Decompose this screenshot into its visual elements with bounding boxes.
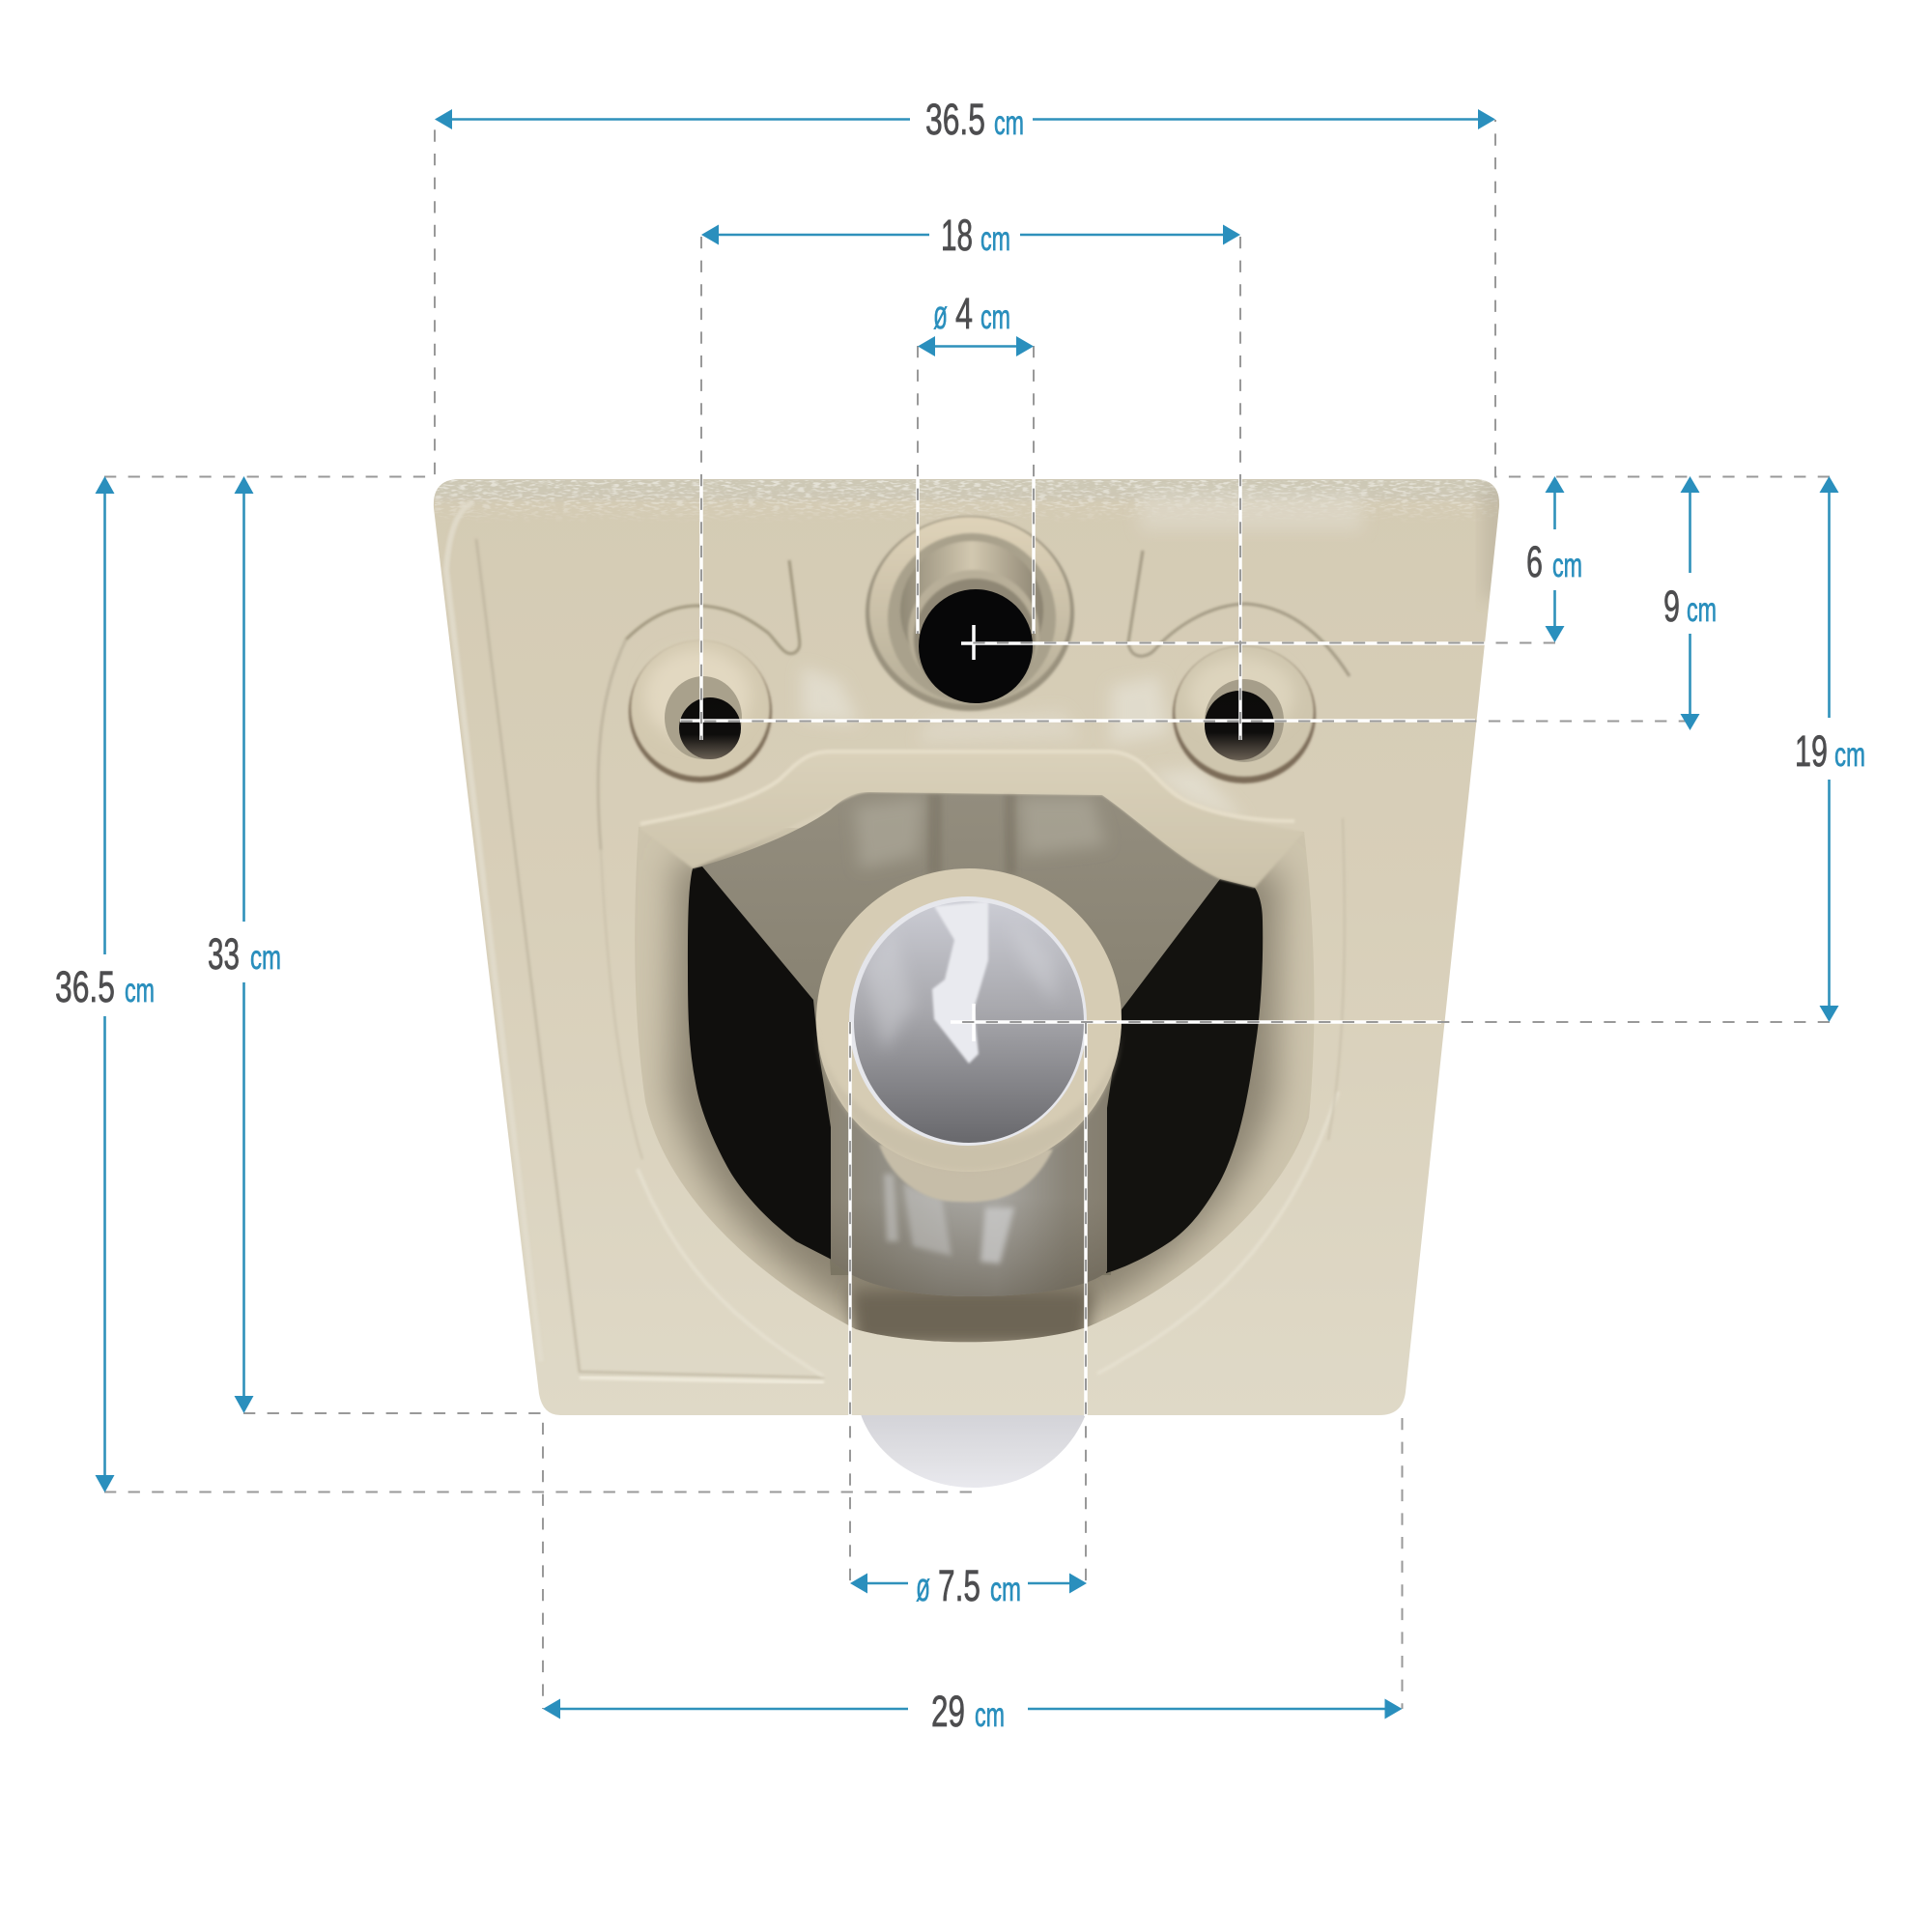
top water inlet	[866, 516, 1074, 711]
dimension: inlet diameter 4 cm: ø	[933, 292, 948, 337]
dashed extension lines	[104, 120, 1830, 1709]
dimension: inlet depth 6 cm: 6	[1526, 537, 1543, 586]
left fixing hole	[629, 639, 772, 782]
dimension: inlet depth 6 cm: cm	[1552, 547, 1582, 584]
dimension: waste pipe diameter 7.5 cm: ø	[916, 1564, 930, 1609]
ceramic body	[434, 479, 1499, 1415]
mottled glaze on pipe	[884, 1174, 1014, 1264]
dimension: overall height 36.5 cm: 36.5	[55, 962, 115, 1011]
dimension: fixing hole spacing 18 cm: cm	[980, 220, 1010, 258]
dimension: height 33 cm: cm	[250, 939, 281, 977]
right fixing hole	[1173, 645, 1316, 783]
dimension: fixing hole spacing 18 cm: 18	[941, 211, 973, 260]
pipe collar shadow	[879, 1145, 1053, 1202]
pipe collar ring	[816, 868, 1122, 1172]
dimension: inlet diameter 4 cm	[918, 289, 1034, 356]
mottled glaze on back wall	[855, 797, 1106, 869]
dimension: waste pipe diameter 7.5 cm: cm	[990, 1571, 1021, 1608]
scuffs around fittings	[802, 667, 1246, 821]
dimension: waste pipe height 19 cm: 19	[1795, 726, 1828, 776]
glaze highlight	[932, 901, 988, 1064]
pipe opening	[849, 896, 1087, 1146]
dimension: fixing hole depth 9 cm: 9	[1663, 582, 1680, 631]
toilet rear photo illustration	[425, 473, 1507, 1488]
dimension: overall top width 36.5 cm: 36.5	[925, 95, 985, 144]
dimension: waste pipe height 19 cm: cm	[1834, 736, 1865, 774]
dimension: fixing hole depth 9 cm: cm	[1687, 591, 1717, 629]
right dark void	[1106, 879, 1263, 1273]
dimension: inlet depth 6 cm	[1526, 476, 1582, 642]
white bowl rim below body	[861, 1414, 1086, 1488]
waste pipe barrel	[831, 1063, 1107, 1296]
dimension: fixing hole spacing 18 cm	[701, 211, 1240, 260]
dimension: bottom width 29 cm: 29	[931, 1687, 965, 1736]
dimension: inlet diameter 4 cm: 4	[955, 289, 973, 338]
dimension: overall top width 36.5 cm: cm	[994, 104, 1024, 142]
left mounting recess outline	[626, 560, 800, 654]
dimension: fixing hole depth 9 cm	[1663, 476, 1717, 730]
dimension: overall height 36.5 cm: cm	[125, 972, 155, 1009]
back wall	[693, 792, 1220, 1275]
dimension: inlet diameter 4 cm: cm	[980, 298, 1010, 336]
left dark void	[688, 867, 834, 1261]
dimension: waste pipe height 19 cm	[1795, 476, 1865, 1022]
surface mouldings	[425, 473, 1507, 1382]
dimension: waste pipe diameter 7.5 cm: 7.5	[938, 1561, 980, 1610]
right mounting recess outline	[1128, 551, 1350, 676]
bowl underside cavity	[635, 792, 1314, 1345]
vertical grooves	[927, 794, 1016, 874]
dimension: bottom width 29 cm	[543, 1687, 1403, 1736]
dimension: bottom width 29 cm: cm	[975, 1696, 1005, 1734]
inlet opening	[919, 589, 1033, 703]
dimension: height 33 cm: 33	[208, 929, 240, 979]
dimension: waste pipe diameter 7.5 cm	[850, 1561, 1087, 1610]
dimension: height 33 cm	[208, 476, 281, 1413]
dimension: overall height 36.5 cm	[55, 476, 155, 1492]
dimension: overall top width 36.5 cm	[435, 95, 1495, 144]
lip around cavity	[639, 752, 1304, 888]
